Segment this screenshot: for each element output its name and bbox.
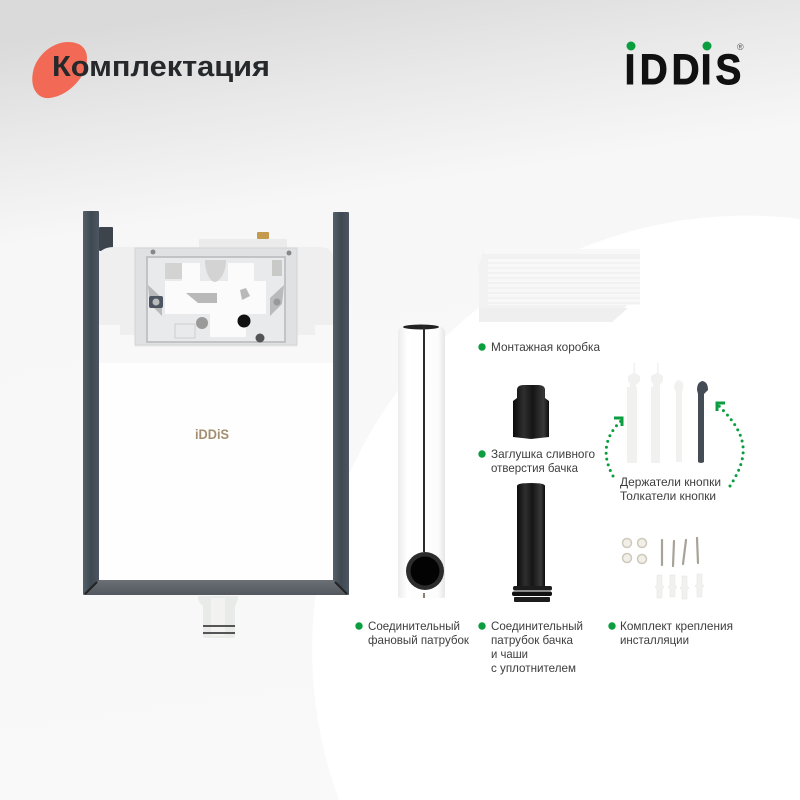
screws — [662, 538, 698, 566]
label: connecting tube: и чаши — [491, 647, 528, 661]
drain plug — [513, 385, 549, 439]
label: fixing kit: инсталляции — [620, 633, 689, 647]
label: fixing kit — [608, 619, 733, 647]
label: mounting box: Монтажная коробка — [491, 340, 600, 354]
label: holders and pushers: Держатели кнопки — [620, 475, 721, 489]
logo: IDDIS: IDDIS — [625, 45, 741, 93]
label: fan pipe: фановый патрубок — [368, 633, 470, 647]
label: drain plug: Заглушка сливного — [491, 447, 595, 461]
frame tab — [99, 227, 113, 251]
label: holders and pushers — [620, 475, 721, 503]
label: connecting tube — [478, 619, 583, 675]
label: fan pipe: Соединительный — [368, 619, 460, 633]
white front panel — [99, 363, 333, 581]
bottom frame bar — [85, 580, 349, 595]
holder 2 — [651, 363, 663, 463]
label: connecting tube: патрубок бачка — [491, 633, 573, 647]
logo: IDDIS: ® — [737, 42, 744, 52]
label: drain plug: отверстия бачка — [491, 461, 578, 475]
mounting box — [477, 249, 640, 322]
drain outlet — [198, 596, 238, 638]
arrow: dotted left — [606, 418, 622, 476]
connecting tube — [512, 483, 552, 602]
cistern top block — [199, 239, 287, 248]
right frame rail — [333, 212, 349, 595]
washers — [622, 538, 646, 564]
installation frame — [83, 211, 349, 638]
cistern lower trim — [99, 325, 333, 363]
orange title blob — [32, 42, 87, 98]
brass fitting — [257, 232, 269, 239]
fan pipe — [398, 324, 445, 598]
title: Комплектация — [52, 51, 270, 83]
label: holders and pushers: Толкатели кнопки — [620, 489, 716, 503]
cistern upper body — [99, 247, 333, 363]
wall anchors — [655, 574, 704, 599]
pusher white — [674, 380, 683, 462]
button holders and pushers — [627, 363, 708, 463]
label: fan pipe — [355, 619, 470, 647]
service panel — [135, 248, 297, 345]
small logo on panel: iDDiS — [195, 427, 229, 442]
frame corner mitres — [85, 582, 347, 594]
fixing kit — [622, 538, 704, 599]
holder 1 — [627, 363, 640, 463]
label: fixing kit: Комплект крепления — [620, 619, 733, 633]
pusher dark — [697, 381, 708, 463]
arrow: dotted right — [717, 403, 743, 486]
label: drain plug — [478, 447, 595, 475]
label: connecting tube: с уплотнителем — [491, 661, 576, 675]
label: connecting tube: Соединительный — [491, 619, 583, 633]
left frame rail — [83, 211, 99, 595]
